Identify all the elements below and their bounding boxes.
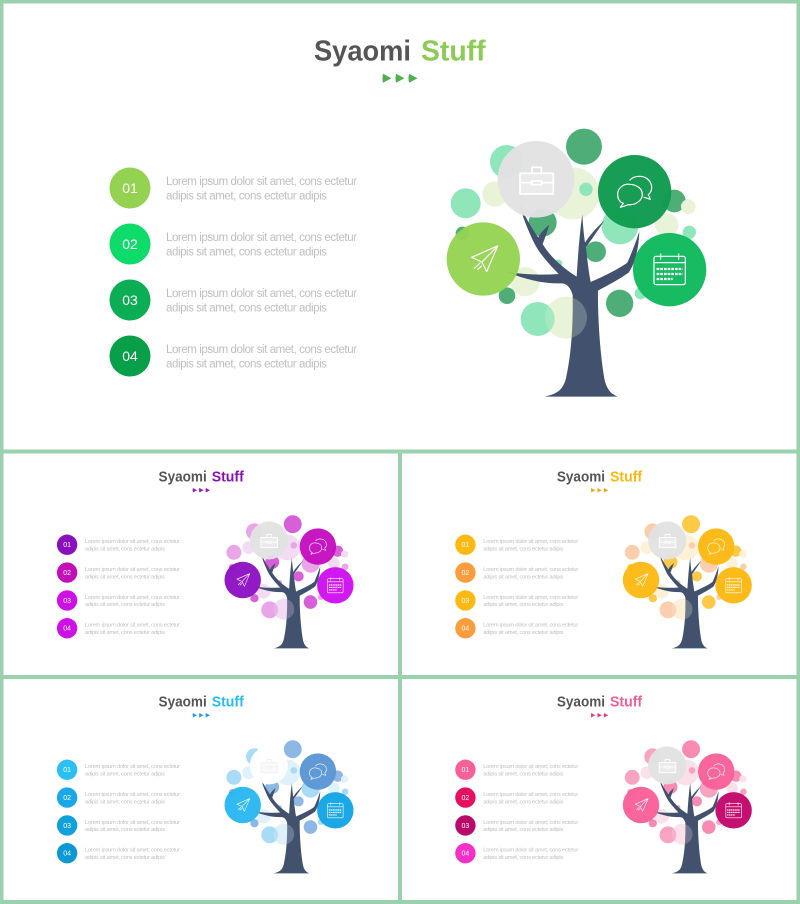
- list item 04: adipis sit amet, cons ectetur adipis: [166, 358, 327, 370]
- list item 04: 04: [63, 626, 71, 633]
- list item 01: adipis sit amet, cons ectetur adipis: [483, 546, 563, 552]
- list item 01: 01: [462, 767, 469, 774]
- list item 03: 03: [122, 292, 138, 308]
- title: [557, 694, 642, 710]
- list item 01: Lorem ipsum dolor sit amet, cons ectetur: [483, 539, 578, 545]
- list item 04: [110, 336, 357, 376]
- list item 02: adipis sit amet, cons ectetur adipis: [483, 799, 563, 805]
- list item 01: adipis sit amet, cons ectetur adipis: [166, 190, 327, 202]
- icon: title arrows: [193, 713, 210, 717]
- list item 01: adipis sit amet, cons ectetur adipis: [85, 546, 165, 552]
- tree infographic with icons: [224, 740, 354, 873]
- title: Stuff: [212, 469, 244, 485]
- list item 01: 01: [122, 180, 138, 196]
- title: Syaomi: [314, 36, 411, 68]
- list item 04: [57, 618, 180, 638]
- list item 04: 04: [462, 851, 469, 858]
- list item 03: Lorem ipsum dolor sit amet, cons ectetur: [166, 288, 357, 300]
- list item 02: adipis sit amet, cons ectetur adipis: [85, 799, 165, 805]
- title: [159, 694, 244, 710]
- list item 03: [110, 280, 357, 320]
- panel: main green slide: [110, 36, 706, 397]
- list item 03: [57, 815, 180, 836]
- list item 02: 02: [462, 570, 469, 577]
- list item 03: [455, 590, 578, 611]
- list item 03: Lorem ipsum dolor sit amet, cons ectetur: [483, 595, 578, 601]
- list item 01: [455, 760, 578, 780]
- list item 02: adipis sit amet, cons ectetur adipis: [166, 246, 327, 258]
- panel: yellow slide: [455, 469, 752, 648]
- title: Syaomi: [557, 694, 605, 710]
- list item 03: adipis sit amet, cons ectetur adipis: [85, 827, 165, 833]
- title: [159, 469, 244, 485]
- title: Stuff: [610, 469, 642, 485]
- list item 03: Lorem ipsum dolor sit amet, cons ectetur: [483, 820, 578, 826]
- list item 03: adipis sit amet, cons ectetur adipis: [85, 602, 165, 608]
- list item 02: 02: [462, 795, 469, 802]
- panel: purple slide: [57, 469, 354, 648]
- list item 02: adipis sit amet, cons ectetur adipis: [85, 574, 165, 580]
- list item 04: adipis sit amet, cons ectetur adipis: [483, 630, 563, 636]
- list item 03: 03: [462, 823, 469, 830]
- title: Stuff: [610, 694, 642, 710]
- list item 03: 03: [462, 598, 469, 605]
- list item 02: [455, 787, 578, 808]
- list item 02: Lorem ipsum dolor sit amet, cons ectetur: [85, 792, 180, 798]
- list item 01: [455, 535, 578, 555]
- list item 02: [57, 787, 180, 808]
- list item 02: [57, 562, 180, 583]
- list item 04: Lorem ipsum dolor sit amet, cons ectetur: [166, 344, 357, 356]
- icon: title arrows: [193, 488, 210, 492]
- list item 01: 01: [462, 542, 469, 549]
- list item 01: adipis sit amet, cons ectetur adipis: [85, 771, 165, 777]
- list item 04: Lorem ipsum dolor sit amet, cons ectetur: [483, 623, 578, 629]
- list item 03: Lorem ipsum dolor sit amet, cons ectetur: [85, 820, 180, 826]
- list item 01: [110, 168, 357, 208]
- list item 03: adipis sit amet, cons ectetur adipis: [483, 827, 563, 833]
- list item 04: 04: [122, 348, 138, 364]
- list item 02: 02: [122, 236, 138, 252]
- list item 03: [57, 590, 180, 611]
- list item 04: [455, 618, 578, 638]
- list item 04: Lorem ipsum dolor sit amet, cons ectetur: [483, 848, 578, 854]
- list item 02: [455, 562, 578, 583]
- list item 04: 04: [63, 851, 71, 858]
- list item 04: Lorem ipsum dolor sit amet, cons ectetur: [85, 848, 180, 854]
- title: Stuff: [212, 694, 244, 710]
- list item 03: 03: [63, 823, 71, 830]
- list item 04: 04: [462, 626, 469, 633]
- icon: title arrows: [591, 488, 608, 492]
- icon: title arrows: [382, 74, 418, 83]
- panel: pink slide: [455, 694, 752, 873]
- list item 01: [57, 535, 180, 555]
- list item 02: Lorem ipsum dolor sit amet, cons ectetur: [483, 792, 578, 798]
- tree infographic with icons: [447, 129, 706, 397]
- list item 04: Lorem ipsum dolor sit amet, cons ectetur: [85, 623, 180, 629]
- list item 01: Lorem ipsum dolor sit amet, cons ectetur: [85, 764, 180, 770]
- title: Stuff: [421, 36, 486, 68]
- list item 03: [455, 815, 578, 836]
- list item 02: 02: [63, 795, 71, 802]
- tree infographic with icons: [623, 515, 752, 648]
- title: Syaomi: [557, 469, 605, 485]
- list item 03: Lorem ipsum dolor sit amet, cons ectetur: [85, 595, 180, 601]
- list item 03: adipis sit amet, cons ectetur adipis: [483, 602, 563, 608]
- list item 04: adipis sit amet, cons ectetur adipis: [85, 855, 165, 861]
- list item 01: Lorem ipsum dolor sit amet, cons ectetur: [483, 764, 578, 770]
- list item 02: Lorem ipsum dolor sit amet, cons ectetur: [166, 232, 357, 244]
- list item 02: [110, 224, 357, 264]
- list item 01: [57, 760, 180, 780]
- list item 01: 01: [63, 542, 71, 549]
- list item 02: Lorem ipsum dolor sit amet, cons ectetur: [85, 567, 180, 573]
- list item 03: adipis sit amet, cons ectetur adipis: [166, 302, 327, 314]
- panel: blue slide: [57, 694, 354, 873]
- list item 04: adipis sit amet, cons ectetur adipis: [85, 630, 165, 636]
- list item 02: Lorem ipsum dolor sit amet, cons ectetur: [483, 567, 578, 573]
- icon: title arrows: [591, 713, 608, 717]
- list item 04: adipis sit amet, cons ectetur adipis: [483, 855, 563, 861]
- list item 02: 02: [63, 570, 71, 577]
- title: [314, 36, 486, 68]
- tree infographic with icons: [224, 515, 354, 648]
- list item 03: 03: [63, 598, 71, 605]
- list item 01: adipis sit amet, cons ectetur adipis: [483, 771, 563, 777]
- title: [557, 469, 642, 485]
- title: Syaomi: [159, 694, 207, 710]
- list item 01: Lorem ipsum dolor sit amet, cons ectetur: [85, 539, 180, 545]
- list item 01: Lorem ipsum dolor sit amet, cons ectetur: [166, 176, 357, 188]
- list item 04: [455, 843, 578, 863]
- tree infographic with icons: [623, 740, 752, 873]
- title: Syaomi: [159, 469, 207, 485]
- list item 02: adipis sit amet, cons ectetur adipis: [483, 574, 563, 580]
- list item 04: [57, 843, 180, 863]
- list item 01: 01: [63, 767, 71, 774]
